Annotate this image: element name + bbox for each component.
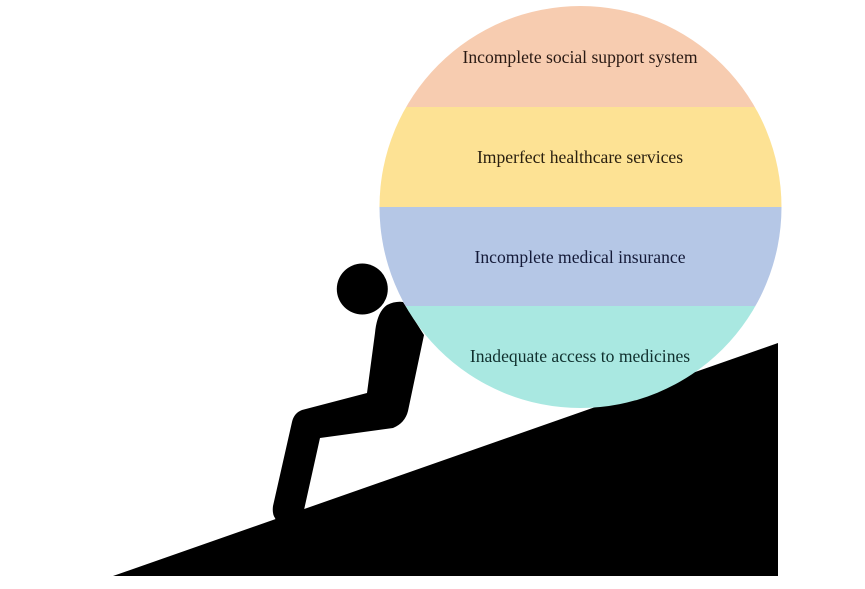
body and legs — [273, 302, 424, 526]
infographic canvas — [113, 6, 782, 576]
label: healthcare services: Imperfect healthcare services — [477, 147, 683, 167]
band: social support — [406, 6, 755, 108]
label: access to medicines: Inadequate access to medicines — [470, 346, 690, 366]
figure pushing the boulder — [273, 264, 424, 526]
band: medical insurance — [379, 207, 783, 306]
hill slope — [113, 343, 778, 576]
label: medical insurance: Incomplete medical insurance — [474, 247, 686, 267]
band: healthcare services — [379, 107, 783, 208]
boulder of barriers — [379, 6, 783, 408]
head — [337, 264, 388, 314]
label: social support: Incomplete social support system — [462, 47, 698, 67]
band: access to medicines — [406, 306, 756, 408]
